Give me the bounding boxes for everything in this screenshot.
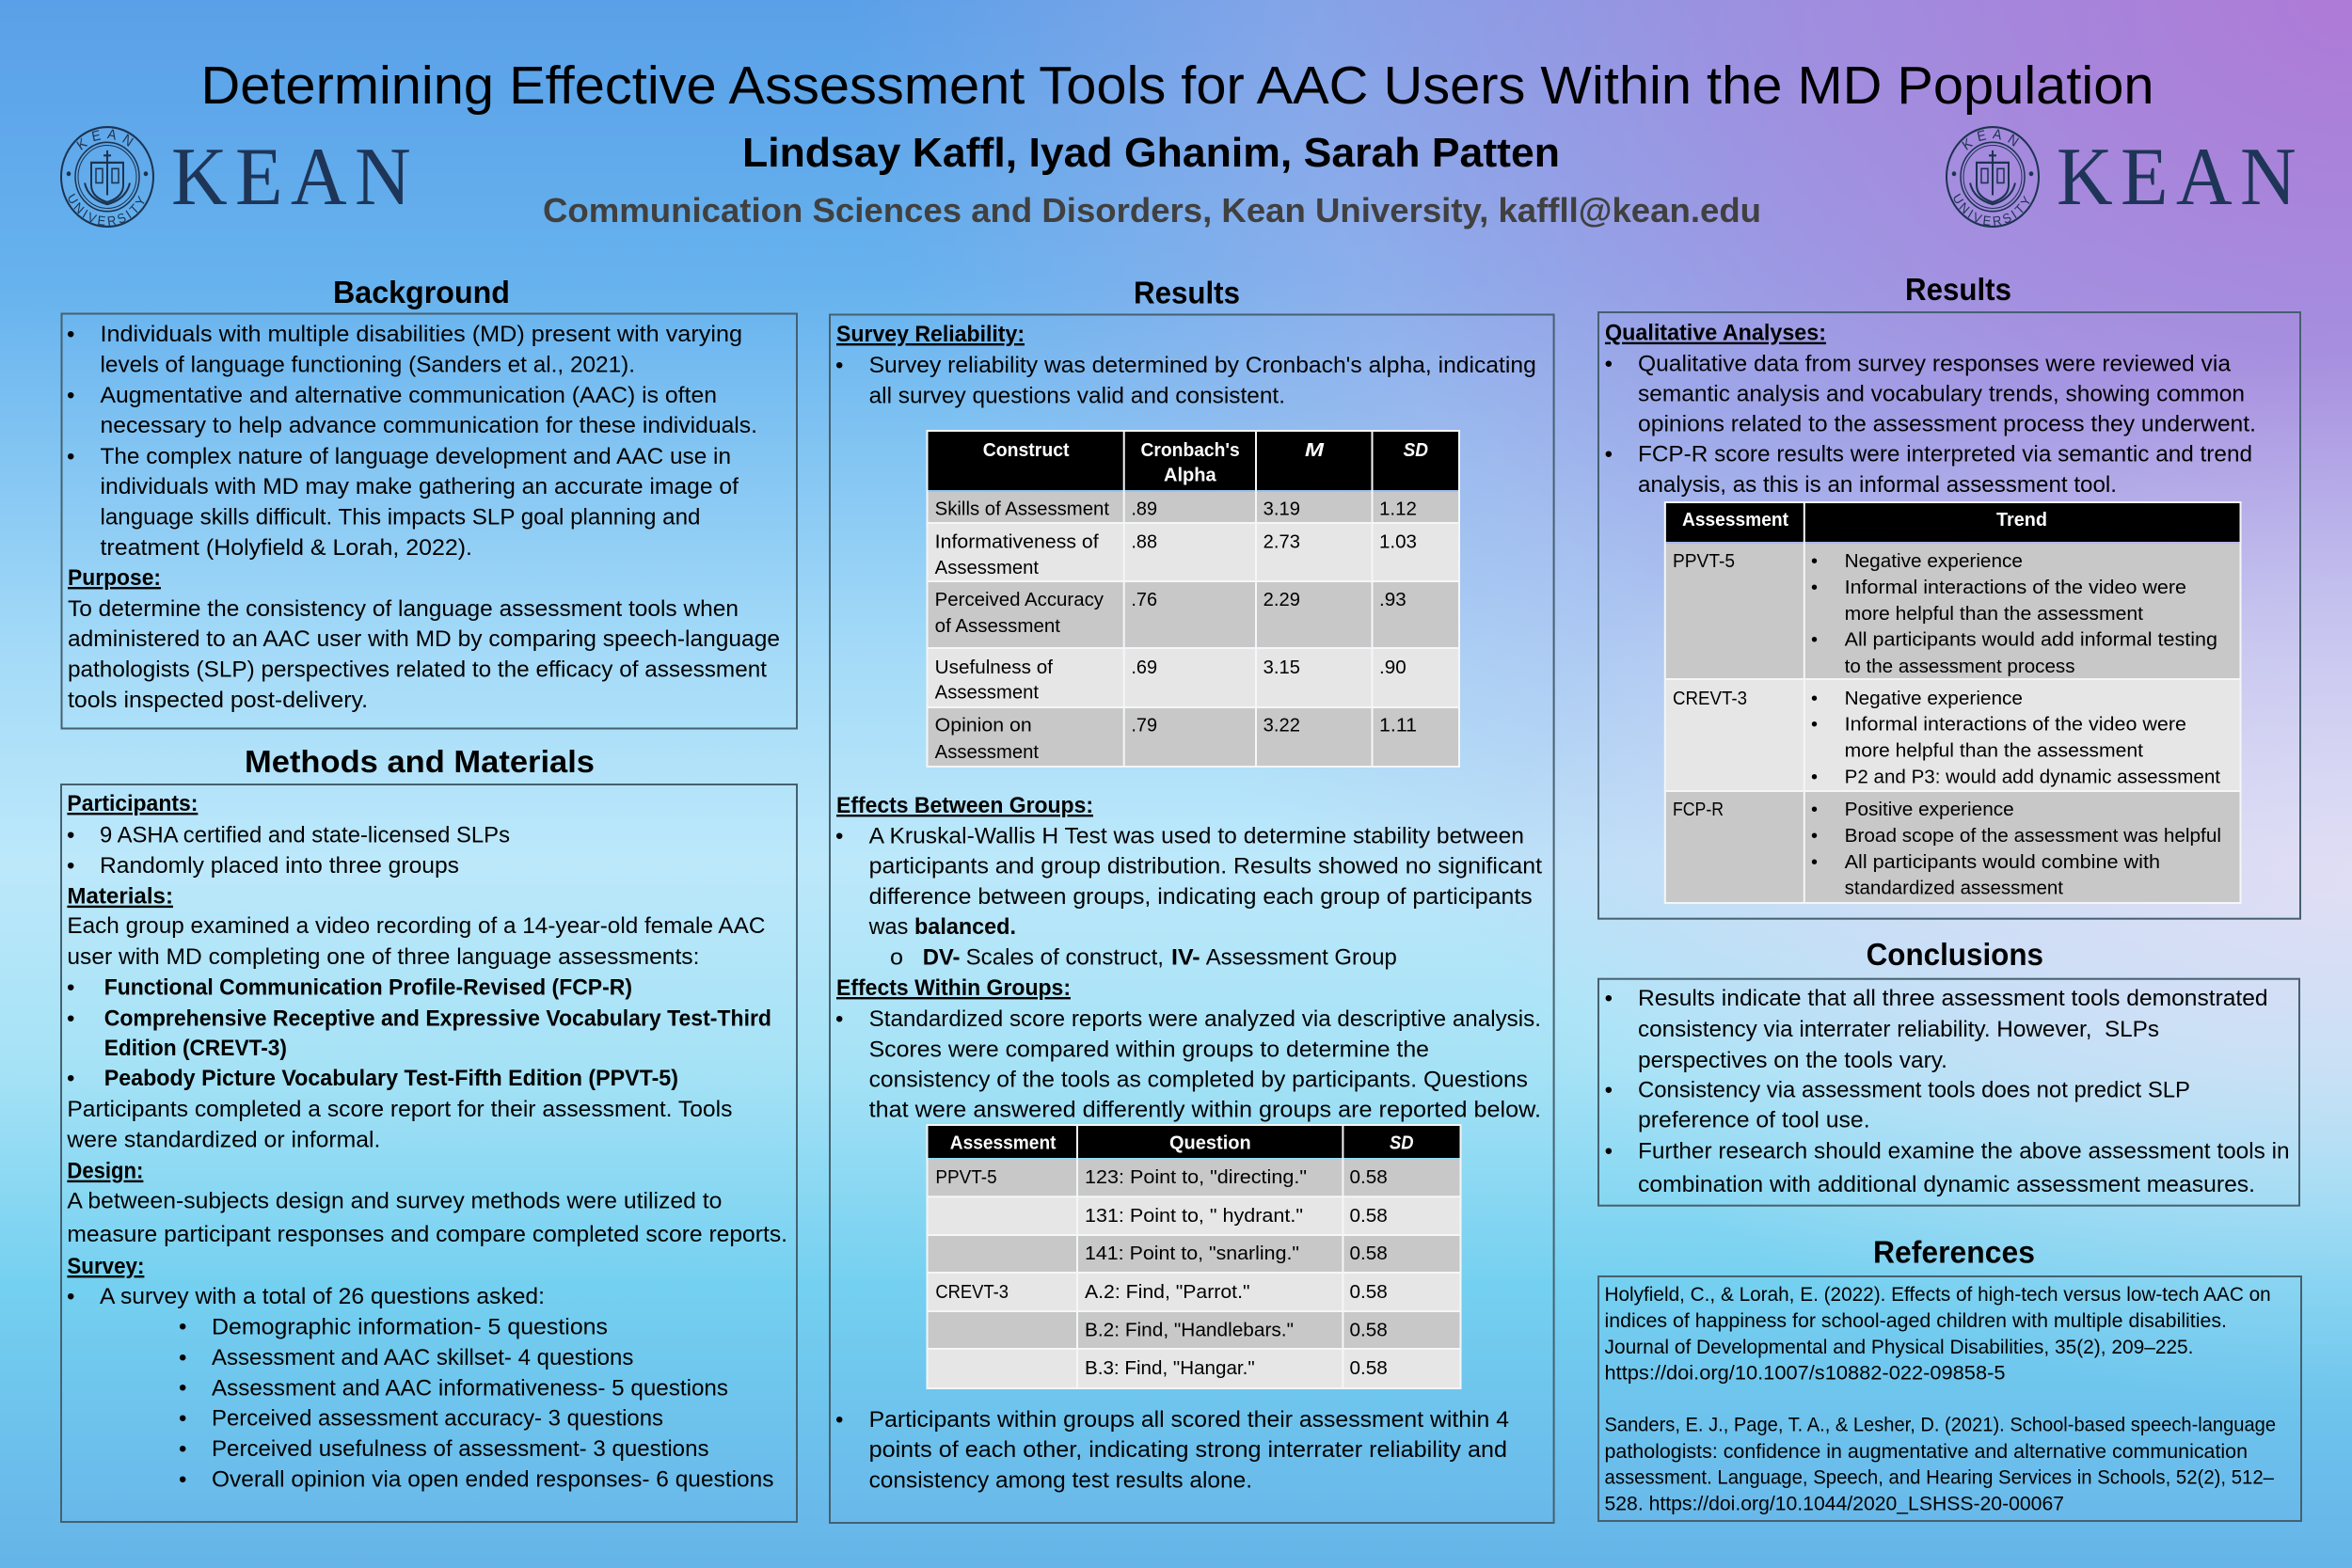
table: questions answered differently: 0.58 (1349, 1167, 1388, 1188)
text block: participants: Participants: (67, 791, 198, 816)
table: assessment trends: Assessment (1682, 510, 1788, 531)
table: questions answered differently: 141: Point to, "snarling." (1085, 1243, 1299, 1264)
text block: materials: Functional Communication Profile-Revised (FCP-R) (104, 975, 632, 1001)
table: survey reliability statistics: 2.29 (1263, 590, 1300, 610)
table: assessment trends: Negative experience (1845, 551, 2023, 572)
table: assessment trends: CREVT-3 (1673, 689, 1747, 709)
text block: conclusions bullets: • (1605, 1139, 1613, 1164)
text block: survey: • (179, 1406, 186, 1432)
table: questions answered differently: A.2: Find, "Parrot." (1085, 1282, 1249, 1303)
affiliation: Communication Sciences and Disorders, Kean University, kaffll@kean.edu (543, 191, 1761, 230)
text block: participants: • (67, 853, 74, 879)
text block: materials: • (67, 975, 74, 1001)
text block: effects between groups: A Kruskal-Wallis H Test was used to determine stability between (869, 824, 1524, 849)
table: assessment trends: more helpful than the assessment (1845, 741, 2143, 762)
text block: survey reliability: Survey reliability was determined by Cronbach's alpha, indicating (869, 353, 1536, 378)
text block: design: Design: (67, 1159, 143, 1184)
heading: Methods and Materials: Methods and Materials (245, 744, 595, 779)
table: survey reliability statistics: Perceived Accuracy (935, 590, 1104, 610)
text block: purpose: To determine the consistency of language assessment tools when (68, 596, 739, 622)
text block: participants: 9 ASHA certified and state-licensed SLPs (100, 823, 510, 848)
table: questions answered differently: Question (1169, 1133, 1251, 1154)
text block: materials: Participants completed a score report for their assessment. Tools (67, 1097, 732, 1122)
table: survey reliability statistics: .69 (1131, 657, 1157, 678)
logo: Kean University left: KEAN (76, 130, 134, 150)
table: questions answered differently: B.2: Find, "Handlebars." (1085, 1321, 1294, 1341)
panel: References (1598, 1276, 2301, 1521)
logo: Kean University left: KEAN (171, 132, 411, 223)
table: survey reliability statistics: Cronbach's (1140, 440, 1240, 461)
text block: effects within groups: that were answered differently within groups are reported below. (869, 1097, 1541, 1123)
text block: conclusions bullets: Further research should examine the above assessment tools in (1638, 1139, 2290, 1164)
text block: Holyfield reference (1605, 1284, 2271, 1385)
text block: survey reliability (835, 322, 1536, 408)
text block: survey: Assessment and AAC informativeness- 5 questions (212, 1375, 728, 1402)
text block: design: A between-subjects design and survey methods were utilized to (67, 1189, 722, 1213)
table: assessment trends: • (1811, 768, 1818, 788)
table: assessment trends: PPVT-5 (1673, 551, 1735, 572)
text block: background bullets: Individuals with multiple disabilities (MD) present with varying (100, 322, 742, 347)
table: assessment trends: • (1811, 630, 1818, 651)
table: questions answered differently: 131: Point to, " hydrant." (1085, 1206, 1303, 1227)
table: assessment trends: standardized assessment (1845, 879, 2063, 899)
text block: conclusions bullets: preference of tool use. (1638, 1108, 1870, 1132)
text block: materials: Comprehensive Receptive and Expressive Vocabulary Test-Third (104, 1006, 771, 1032)
title: Determining Effective Assessment Tools for AAC Users Within the MD Population (201, 55, 2154, 116)
text block: conclusions bullets: Consistency via assessment tools does not predict SLP (1638, 1078, 2190, 1103)
text block: effects within groups: Standardized score reports were analyzed via descriptive analysis. (869, 1006, 1541, 1032)
text block: survey reliability: • (835, 353, 843, 378)
text block: survey: Perceived usefulness of assessment- 3 questions (212, 1436, 709, 1462)
table: assessment trends: to the assessment process (1845, 657, 2075, 677)
text block: interrater reliability: points of each other, indicating strong interrater reliability and (869, 1437, 1507, 1463)
text block: purpose: Purpose: (68, 565, 161, 591)
table: survey reliability statistics: .89 (1131, 499, 1157, 520)
text block: Sanders reference: 528. https://doi.org/10.1044/2020_LSHSS-20-00067 (1605, 1494, 2064, 1515)
text block: background bullets (67, 322, 757, 561)
heading: Conclusions: Conclusions (1867, 937, 2043, 972)
text block: interrater reliability: Participants within groups all scored their assessment within 4 (869, 1407, 1509, 1433)
text block: effects between groups: DV- (923, 944, 960, 971)
logo: Kean University right: UNIVERSITY (1953, 194, 2030, 226)
text block: effects between groups: difference between groups, indicating each group of participants (869, 884, 1533, 910)
text block: survey: • (179, 1436, 186, 1462)
text block: conclusions bullets: perspectives on the tools vary. (1638, 1048, 1947, 1073)
table: survey reliability statistics: M (1305, 440, 1326, 461)
text block: Sanders reference: Sanders, E. J., Page, T. A., & Lesher, D. (2021). School-based speech-language (1605, 1415, 2276, 1436)
text block: effects between groups: • (835, 824, 843, 849)
table: survey reliability statistics: Alpha (1164, 466, 1217, 486)
table: survey reliability statistics: .88 (1131, 532, 1157, 553)
table: assessment trends: Negative experience (1845, 689, 2023, 709)
table: survey reliability statistics: Opinion on (935, 716, 1032, 736)
table: assessment trends: • (1811, 852, 1818, 873)
table: survey reliability statistics: SD (1404, 440, 1428, 461)
table: assessment trends: Informal interactions of the video were (1845, 578, 2186, 598)
logo: Kean University right (1946, 126, 2296, 228)
text block: effects between groups: IV- (1171, 944, 1200, 971)
text block: effects between groups: participants and group distribution. Results showed no significant (869, 854, 1542, 879)
authors: Lindsay Kaffl, Iyad Ghanim, Sarah Patten (742, 130, 1560, 176)
text block: effects within groups (835, 975, 1541, 1123)
text block: survey: • (67, 1284, 74, 1309)
table: survey reliability statistics: 3.22 (1263, 716, 1300, 736)
text block: survey: Assessment and AAC skillset- 4 questions (212, 1345, 633, 1370)
text block: qualitative analyses: • (1605, 352, 1613, 376)
text block: survey: Survey: (67, 1254, 144, 1279)
text block: participants: • (67, 823, 74, 848)
text block: design: measure participant responses and compare completed score reports. (67, 1222, 787, 1247)
text block: qualitative analyses: analysis, as this is an informal assessment tool. (1638, 472, 2117, 498)
table: questions answered differently: 0.58 (1349, 1321, 1388, 1341)
text block: Holyfield reference: https://doi.org/10.1007/s10882-022-09858-5 (1605, 1363, 2006, 1385)
table: questions answered differently: CREVT-3 (935, 1282, 1009, 1303)
table: questions answered differently: 123: Point to, "directing." (1085, 1167, 1307, 1188)
text block: background bullets: treatment (Holyfield & Lorah, 2022). (100, 535, 472, 561)
text block: qualitative analyses: Qualitative Analyses: (1605, 321, 1826, 346)
logo: Kean University right: KEAN (1962, 130, 2019, 150)
table: assessment trends: Informal interactions of the video were (1845, 715, 2186, 736)
text block: survey: • (179, 1467, 186, 1493)
table: survey reliability statistics: .76 (1131, 590, 1157, 610)
text block: background bullets: • (67, 322, 74, 347)
table: questions answered differently: 0.58 (1349, 1282, 1388, 1303)
table: survey reliability statistics: 1.12 (1379, 499, 1417, 520)
text block: Sanders reference: assessment. Language, Speech, and Hearing Services in Schools, 52(2), 512– (1605, 1467, 2274, 1489)
text block: survey: • (179, 1314, 186, 1339)
table: questions answered differently: Assessment (950, 1133, 1057, 1154)
text block: background bullets: • (67, 444, 74, 469)
table: assessment trends (1665, 502, 2241, 903)
table: survey reliability statistics: 3.15 (1263, 657, 1300, 678)
text block: conclusions bullets: consistency via interrater reliability. However, SLPs (1638, 1017, 2159, 1042)
text block: effects between groups (835, 793, 1542, 971)
heading: Results (middle): Results (1134, 276, 1240, 310)
text block: conclusions bullets (1605, 986, 2290, 1197)
table: questions answered differently: PPVT-5 (935, 1167, 997, 1188)
table: survey reliability statistics: Assessment (935, 742, 1039, 763)
heading: Background: Background (333, 275, 510, 309)
table: questions answered differently: 0.58 (1349, 1358, 1388, 1379)
text block: background bullets: levels of language functioning (Sanders et al., 2021). (100, 352, 635, 377)
text block: effects between groups: o (890, 944, 903, 971)
panel: Background (62, 314, 797, 728)
text block: Holyfield reference: Journal of Developmental and Physical Disabilities, 35(2), 209–225. (1605, 1337, 2194, 1358)
table: survey reliability statistics: 1.03 (1379, 532, 1417, 553)
text block: materials: were standardized or informal. (66, 1127, 380, 1153)
text block: participants: Randomly placed into three groups (100, 853, 459, 879)
text block: materials (66, 884, 771, 1153)
table: assessment trends: All participants would combine with (1845, 852, 2160, 873)
table: survey reliability statistics: Assessment (935, 558, 1039, 578)
table: assessment trends: • (1811, 826, 1818, 847)
text block: survey: A survey with a total of 26 questions asked: (100, 1284, 545, 1309)
table: assessment trends: Positive experience (1845, 800, 2014, 820)
text block: survey reliability: Survey Reliability: (836, 322, 1025, 347)
text block: effects within groups: Effects Within Groups: (836, 975, 1071, 1001)
text block: Holyfield reference: Holyfield, C., & Lorah, E. (2022). Effects of high-tech versus low-tech AAC on (1605, 1284, 2271, 1306)
table: questions answered differently: B.3: Find, "Hangar." (1085, 1358, 1255, 1379)
text block: survey: Demographic information- 5 questions (212, 1315, 608, 1339)
text block: design (67, 1159, 787, 1247)
table: assessment trends: P2 and P3: would add dynamic assessment (1845, 768, 2220, 788)
table: assessment trends: • (1811, 551, 1818, 572)
table: assessment trends: FCP-R (1673, 800, 1724, 820)
text block: background bullets: • (67, 383, 74, 408)
table: survey reliability statistics (928, 431, 1459, 767)
table: survey reliability statistics: Usefulness of (935, 657, 1053, 678)
table: assessment trends: • (1811, 689, 1818, 709)
text block: effects within groups: • (835, 1006, 843, 1032)
heading: Results (right): Results (1905, 272, 2011, 307)
text block: effects between groups: balanced. (914, 914, 1016, 940)
logo: Kean University left: UNIVERSITY (68, 194, 145, 226)
text block: qualitative analyses (1605, 321, 2256, 498)
text block: Sanders reference (1605, 1415, 2276, 1515)
text block: survey: • (179, 1345, 186, 1370)
text block: survey: Overall opinion via open ended responses- 6 questions (212, 1467, 773, 1493)
table: assessment trends: • (1811, 715, 1818, 736)
text block: participants (67, 791, 510, 879)
text block: materials: • (67, 1066, 74, 1091)
logo: Kean University right: KEAN (2057, 132, 2296, 223)
text block: purpose: administered to an AAC user with MD by comparing speech-language (68, 626, 780, 652)
panel: Results (middle) (830, 314, 1554, 1523)
text block: Holyfield reference: indices of happiness for school-aged children with multiple disabilities. (1605, 1310, 2227, 1332)
table: survey reliability statistics: Skills of Assessment (935, 499, 1109, 520)
text block: conclusions bullets: • (1605, 1078, 1613, 1103)
text block: materials: Each group examined a video recording of a 14-year-old female AAC (67, 913, 765, 939)
text block: effects between groups: was (868, 914, 908, 940)
table: assessment trends: Broad scope of the assessment was helpful (1845, 826, 2221, 847)
text block: survey reliability: all survey questions valid and consistent. (869, 384, 1285, 408)
text block: qualitative analyses: opinions related to the assessment process they underwent. (1638, 412, 2256, 436)
text block: interrater reliability (835, 1407, 1509, 1494)
table: assessment trends: Trend (1996, 510, 2047, 531)
text block: conclusions bullets: combination with additional dynamic assessment measures. (1638, 1172, 2255, 1197)
table: survey reliability statistics: Informativeness of (935, 532, 1099, 553)
table: assessment trends: more helpful than the assessment (1845, 604, 2143, 625)
text block: background bullets: necessary to help advance communication for these individuals. (100, 413, 757, 438)
logo: Kean University left (60, 126, 411, 228)
text block: conclusions bullets: • (1605, 986, 1613, 1011)
table: questions answered differently: 0.58 (1349, 1243, 1388, 1264)
text block: Sanders reference: pathologists: confidence in augmentative and alternative communication (1605, 1441, 2248, 1463)
text block: survey: Perceived assessment accuracy- 3 questions (212, 1406, 663, 1432)
text block: purpose: tools inspected post-delivery. (68, 688, 368, 713)
panel: Results (right) (1598, 312, 2300, 919)
text block: purpose: pathologists (SLP) perspectives related to the efficacy of assessment (68, 657, 767, 683)
text block: effects between groups: Effects Between Groups: (836, 793, 1093, 818)
table: survey reliability statistics: Assessment (935, 683, 1039, 704)
text block: qualitative analyses: FCP-R score results were interpreted via semantic and trend (1638, 442, 2252, 467)
heading: References: References (1873, 1235, 2035, 1270)
text block: effects within groups: consistency of the tools as completed by participants. Questions (869, 1067, 1528, 1093)
text block: survey (67, 1254, 773, 1493)
table: survey reliability statistics: .79 (1131, 716, 1157, 736)
panel: Conclusions (1598, 979, 2299, 1206)
text block: interrater reliability: consistency among test results alone. (869, 1468, 1252, 1494)
text block: survey: • (179, 1375, 186, 1401)
text block: effects within groups: Scores were compared within groups to determine the (869, 1037, 1429, 1063)
table: survey reliability statistics: 3.19 (1263, 499, 1300, 520)
table: questions answered differently (928, 1125, 1460, 1388)
text block: qualitative analyses: Qualitative data from survey responses were reviewed via (1638, 352, 2232, 376)
table: assessment trends: All participants would add informal testing (1845, 630, 2217, 651)
text block: conclusions bullets: Results indicate that all three assessment tools demonstrated (1638, 986, 2268, 1011)
text block: qualitative analyses: semantic analysis and vocabulary trends, showing common (1638, 382, 2245, 406)
table: assessment trends: • (1811, 800, 1818, 820)
table: questions answered differently: SD (1390, 1133, 1413, 1154)
text block: materials: Materials: (67, 884, 173, 910)
text block: background bullets: individuals with MD may make gathering an accurate image of (100, 474, 739, 499)
table: survey reliability statistics: 2.73 (1263, 532, 1300, 553)
text block: purpose (68, 565, 780, 713)
text block: effects between groups: Assessment Group (1206, 944, 1397, 971)
text block: effects between groups: Scales of construct, (966, 944, 1164, 971)
table: survey reliability statistics: of Assessment (935, 616, 1060, 637)
table: survey reliability statistics: Construct (983, 440, 1070, 461)
table: assessment trends: • (1811, 578, 1818, 598)
text block: materials: user with MD completing one of three language assessments: (67, 944, 699, 970)
text block: background bullets: Augmentative and alternative communication (AAC) is often (100, 383, 717, 408)
table: survey reliability statistics: 1.11 (1379, 716, 1417, 736)
text block: materials: Edition (CREVT-3) (104, 1036, 287, 1061)
text block: interrater reliability: • (835, 1407, 843, 1433)
panel: Methods and Materials (61, 784, 797, 1522)
table: survey reliability statistics: .90 (1379, 657, 1406, 678)
text block: background bullets: language skills difficult. This impacts SLP goal planning and (100, 504, 700, 531)
text block: materials: • (67, 1006, 74, 1032)
text block: materials: Peabody Picture Vocabulary Test-Fifth Edition (PPVT-5) (104, 1066, 678, 1091)
table: questions answered differently: 0.58 (1349, 1206, 1388, 1227)
table: survey reliability statistics: .93 (1379, 590, 1406, 610)
text block: background bullets: The complex nature of language development and AAC use in (100, 444, 731, 469)
text block: qualitative analyses: • (1605, 442, 1613, 467)
